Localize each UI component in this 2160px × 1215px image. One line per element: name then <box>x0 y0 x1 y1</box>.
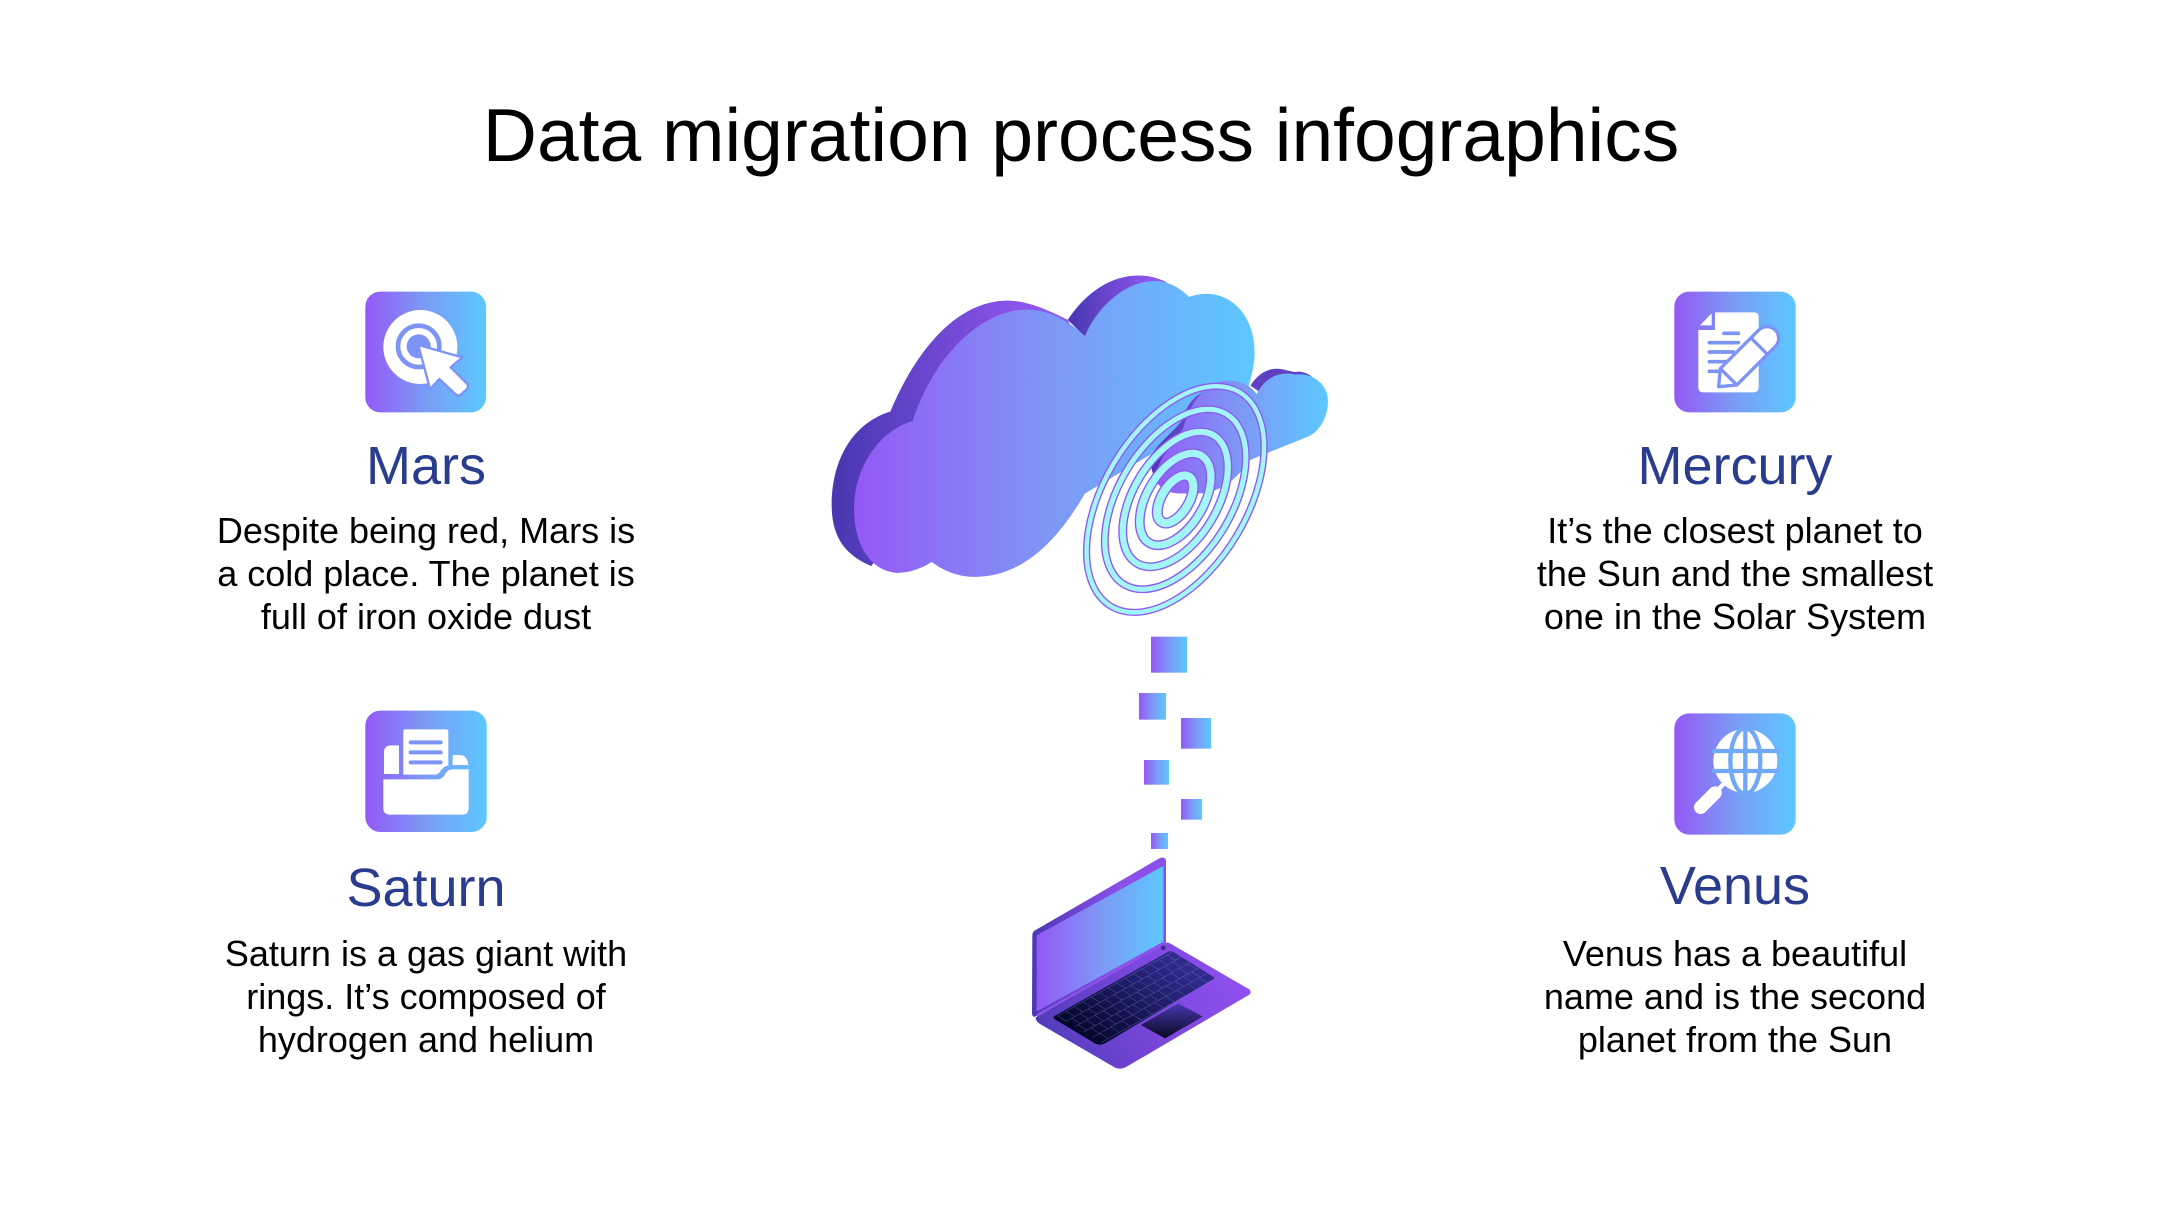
text: Mercury description: one in the Solar System <box>1544 596 1926 637</box>
laptop lid <box>1032 858 1166 1017</box>
icon: folder with document <box>365 710 487 832</box>
illustration: cloud with rings <box>832 276 1328 616</box>
text: Mercury description <box>1537 510 1933 637</box>
laptop <box>1032 858 1251 1069</box>
text: Mercury description: the Sun and the smallest <box>1537 553 1933 594</box>
text: Mars description <box>217 510 635 637</box>
laptop base <box>1036 942 1251 1069</box>
text: Venus description: planet from the Sun <box>1578 1019 1892 1060</box>
heading: Mercury: Mercury <box>1637 436 1832 496</box>
heading: Venus: Venus <box>1660 856 1810 916</box>
text: Venus description: Venus has a beautiful <box>1563 933 1907 974</box>
cloud: dark back side <box>832 275 1190 566</box>
data blocks <box>1139 637 1211 849</box>
text: Mars description: a cold place. The planet is <box>217 553 635 594</box>
laptop screen <box>1037 866 1163 1012</box>
text: Mars description: full of iron oxide dust <box>261 596 591 637</box>
trackpad <box>1141 1003 1203 1038</box>
icon: target and cursor <box>365 292 486 412</box>
heading: Mars: Mars <box>366 436 486 496</box>
text: Venus description <box>1544 933 1926 1060</box>
panel: Mars <box>217 292 635 637</box>
laptop hinge highlight <box>1037 943 1166 1015</box>
text: Saturn description: Saturn is a gas giant with <box>225 933 627 974</box>
text: Mars description: Despite being red, Mars is <box>217 510 635 551</box>
text: Venus description: name and is the second <box>1544 976 1926 1017</box>
panel: Venus <box>1544 713 1926 1060</box>
text: Mercury description: It’s the closest planet to <box>1547 510 1923 551</box>
icon: document with pencil <box>1674 292 1796 412</box>
panel: Saturn <box>225 710 627 1060</box>
title: Data migration process infographics <box>483 93 1679 177</box>
keyboard <box>1053 951 1214 1045</box>
icon: globe with magnifier <box>1674 713 1796 835</box>
heading: Saturn: Saturn <box>346 858 506 918</box>
text: Saturn description <box>225 933 627 1060</box>
text: Saturn description: hydrogen and helium <box>258 1019 594 1060</box>
cloud: small front cloud <box>1150 369 1328 494</box>
illustration: data blocks and laptop <box>1032 636 1251 1069</box>
concentric signal rings <box>1050 357 1301 642</box>
panel: Mercury <box>1537 292 1933 637</box>
cloud: gradient front <box>854 281 1255 577</box>
text: Saturn description: rings. It’s composed of <box>246 976 606 1017</box>
